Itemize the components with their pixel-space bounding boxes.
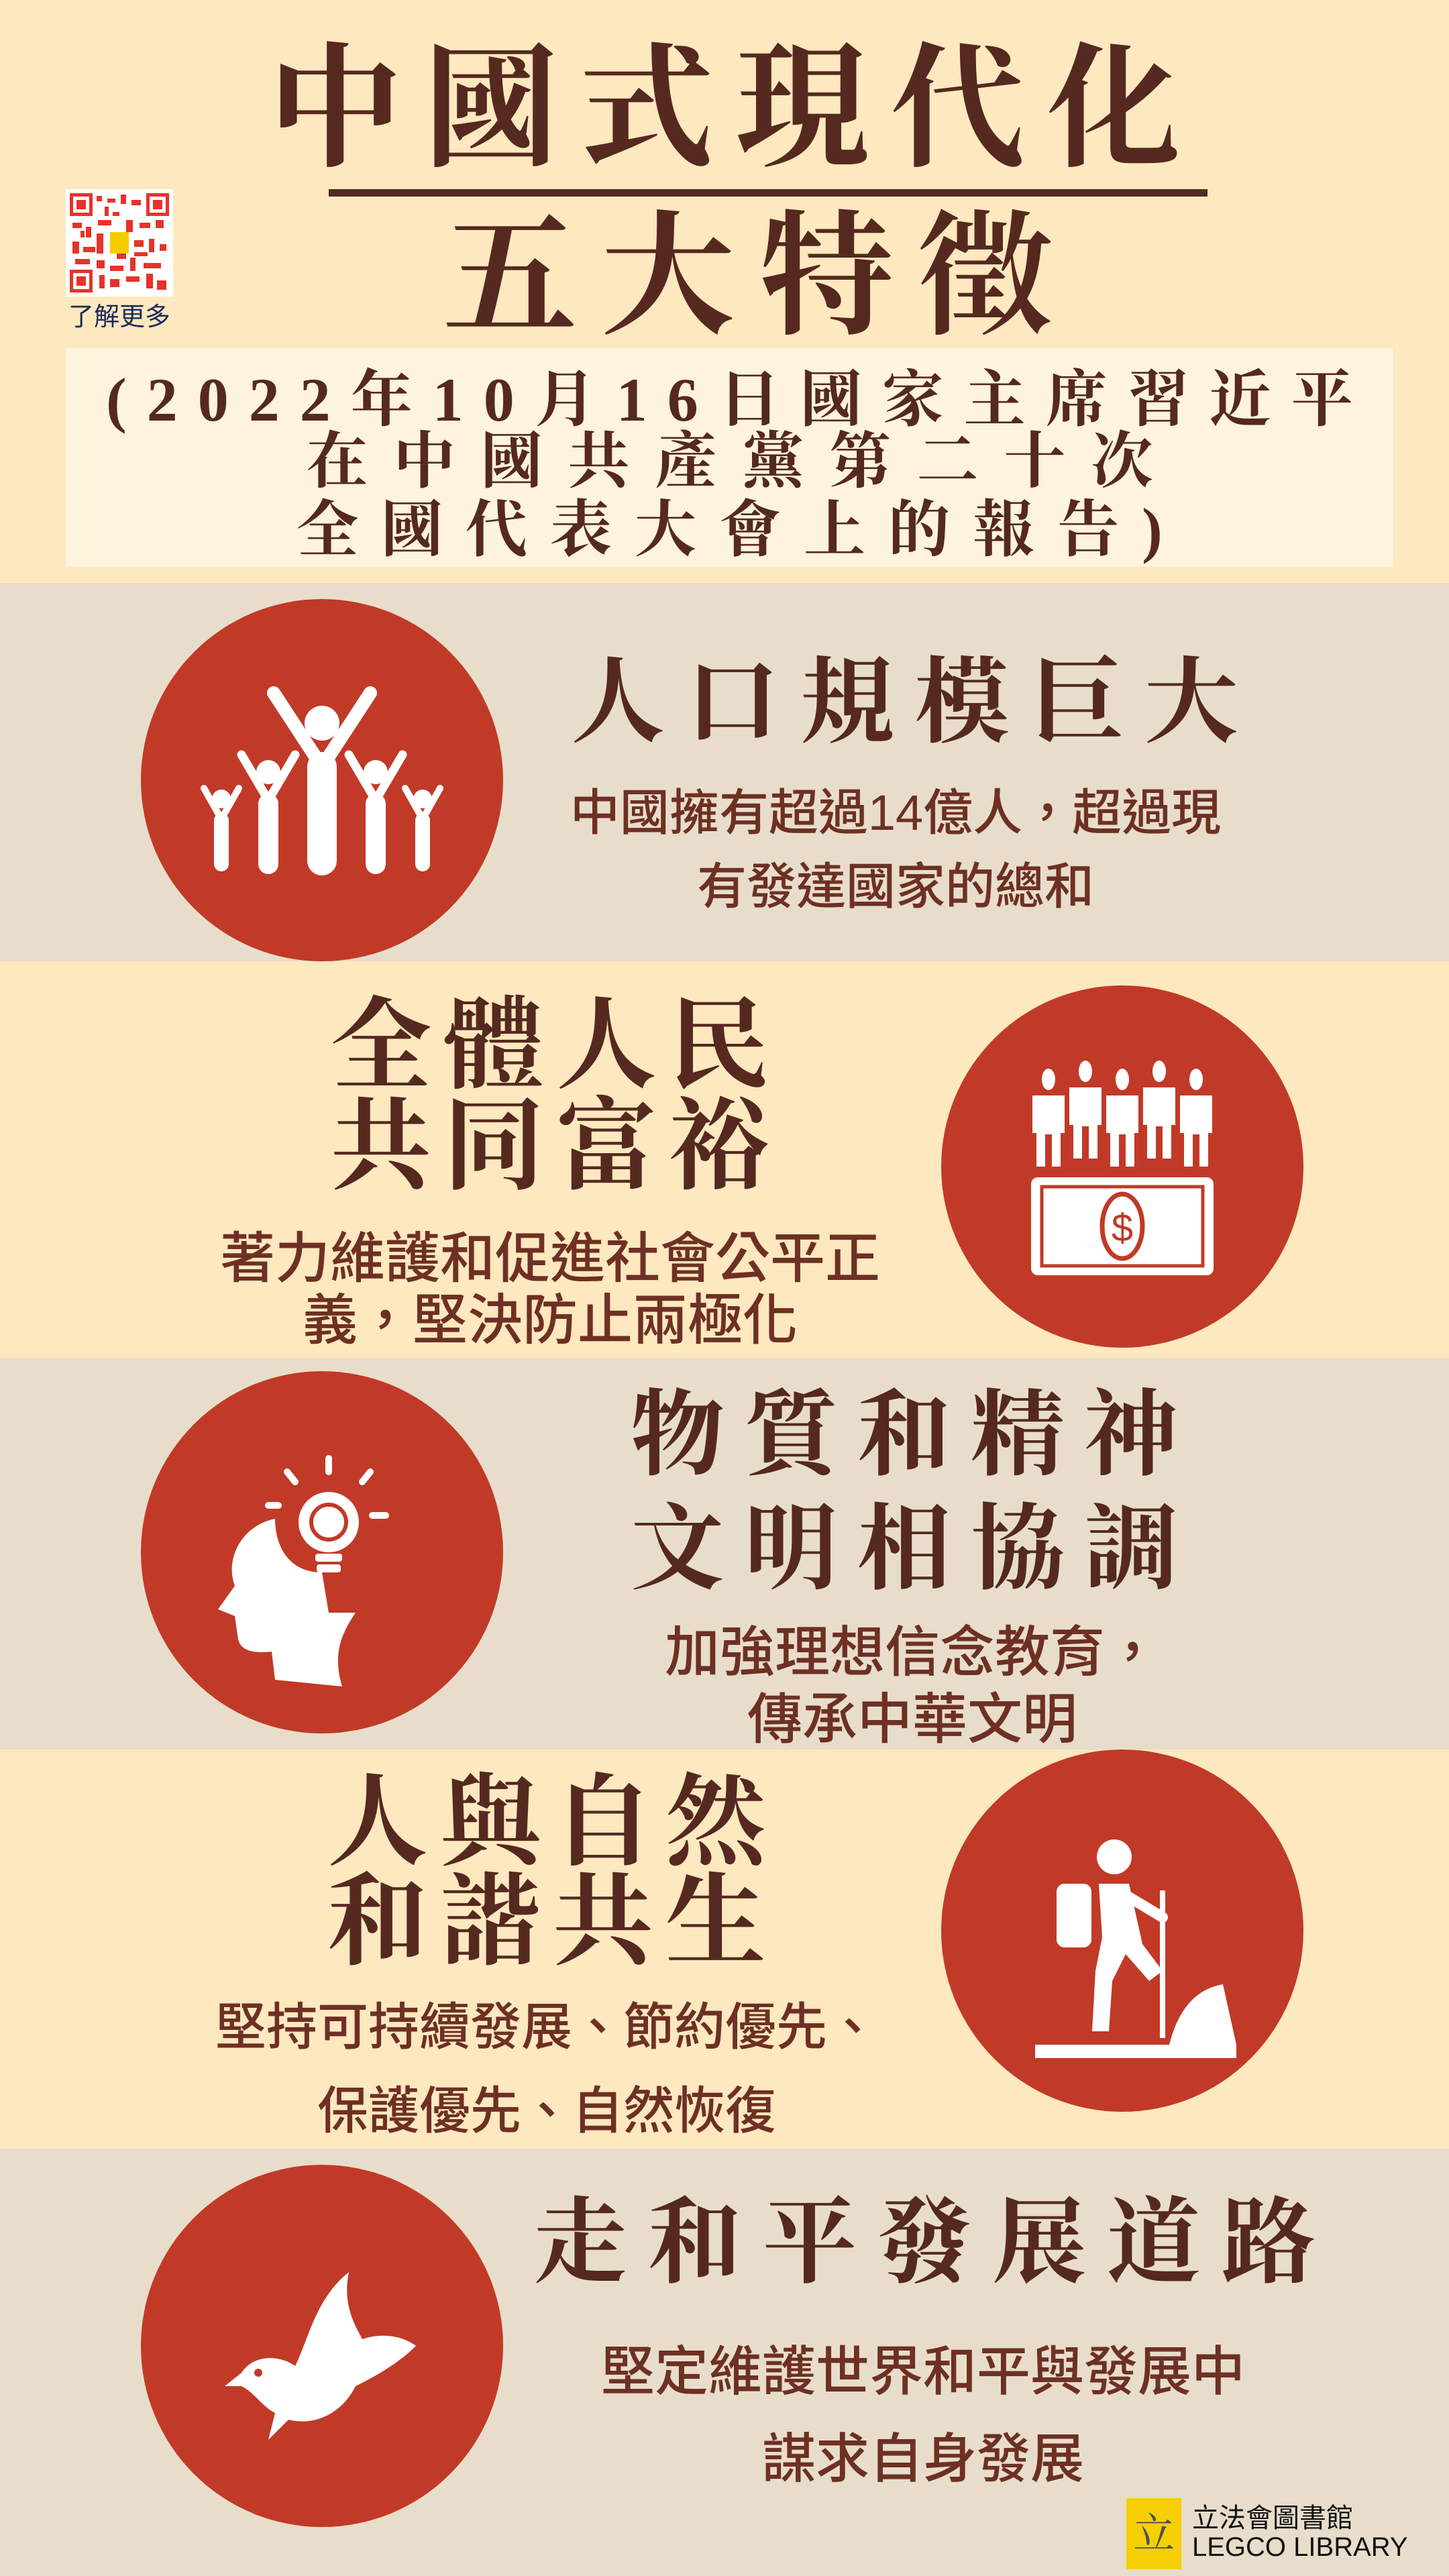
body text: [215, 1999, 878, 2140]
body text: 中國擁有超過14億人，超過現: [570, 785, 1221, 841]
logo: LegCo Library: [1126, 2498, 1408, 2569]
panel 2: 全體人民共同富裕: [0, 961, 1449, 1358]
body text: 堅定維護世界和平與發展中: [601, 2342, 1245, 2402]
icon: hiker: [941, 1750, 1303, 2112]
body text: 有發達國家的總和: [697, 859, 1094, 914]
body text: [220, 1228, 880, 1351]
icon: people and money: [941, 985, 1303, 1348]
body text: 著力維護和促進社會公平正: [220, 1228, 880, 1289]
body text: [601, 2342, 1245, 2489]
icon: dove: [141, 2165, 503, 2527]
heading: 人與自然: [327, 1768, 778, 1879]
heading: 共同富裕: [331, 1091, 782, 1203]
heading: 文明相協調: [631, 1498, 1197, 1602]
panel 5: 走和平發展道路: [0, 2149, 1449, 2576]
logo text: LEGCO LIBRARY: [1192, 2532, 1408, 2562]
header background: [0, 0, 1449, 583]
QR caption: 了解更多: [68, 303, 170, 331]
body text: 謀求自身發展: [762, 2429, 1084, 2489]
heading: [631, 1384, 1197, 1602]
panel 4: 人與自然和諧共生: [0, 1750, 1449, 2149]
heading: 全體人民: [331, 991, 782, 1102]
icon: head with lightbulb: [141, 1371, 503, 1733]
QR code: [66, 189, 173, 297]
title underline: [329, 189, 1208, 197]
icon: people and money: $: [1112, 1206, 1133, 1250]
heading: [331, 991, 782, 1203]
title line 1: 中國式現代化: [268, 36, 1202, 184]
subtitle line 2: 在中國共產黨第二十次: [306, 427, 1178, 496]
body text: 保護優先、自然恢復: [317, 2083, 776, 2140]
heading: 人口規模巨大: [571, 651, 1259, 755]
body text: [665, 1622, 1160, 1750]
body text: [570, 785, 1221, 914]
heading: 走和平發展道路: [533, 2192, 1336, 2296]
body text: 傳承中華文明: [747, 1689, 1077, 1750]
logo mark: 立: [1133, 2500, 1175, 2560]
icon: crowd: [141, 599, 503, 961]
heading: [327, 1768, 778, 1978]
body text: 義，堅決防止兩極化: [303, 1290, 798, 1351]
heading: 物質和精神: [631, 1384, 1197, 1488]
heading: 和諧共生: [327, 1867, 778, 1978]
body text: 堅持可持續發展、節約優先、: [215, 1999, 878, 2056]
logo text: 立法會圖書館: [1192, 2504, 1353, 2533]
logo mark: [1126, 2498, 1181, 2569]
subtitle line 3: 全國代表大會上的報告): [297, 496, 1185, 564]
subtitle line 1: (2022年10月16日國家主席習近平: [106, 366, 1373, 434]
logo text: [1192, 2504, 1408, 2562]
title line 2: 五大特徵: [443, 204, 1076, 352]
body text: 加強理想信念教育，: [665, 1622, 1160, 1683]
panel 3: 物質和精神文明相協調: [0, 1358, 1449, 1750]
subtitle box: [66, 348, 1393, 567]
panel 1: 人口規模巨大: [0, 583, 1449, 961]
